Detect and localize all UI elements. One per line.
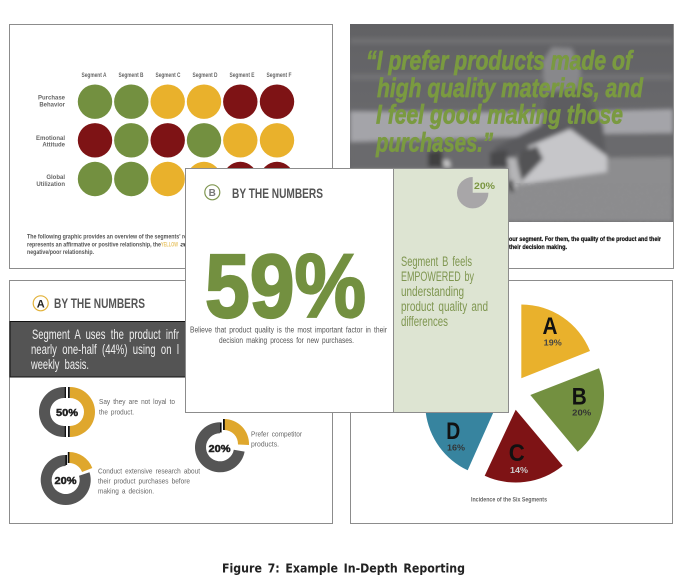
empowered statement: Segment B feels <box>401 254 472 269</box>
slice C <box>485 410 563 483</box>
column headings: Segment A <box>82 73 107 79</box>
donut: 20 percent competitor <box>195 419 249 472</box>
photo: person sitting on grass <box>350 24 673 222</box>
row labels: Global <box>46 175 65 181</box>
slice A: 19% <box>544 338 562 348</box>
empowered statement: EMPOWERED by <box>401 269 474 284</box>
row labels: Utilization <box>36 182 65 188</box>
statistic description: decision making process for new purchases. <box>219 336 354 345</box>
donut label: competitor <box>251 430 302 448</box>
column headings <box>82 73 292 79</box>
slice C: C <box>509 440 525 467</box>
panel: segment B by the numbers <box>186 168 508 412</box>
icon: segment B badge: B <box>209 188 216 199</box>
figure caption: Figure 7: Example In-Depth Reporting <box>222 562 465 576</box>
column headings: Segment F <box>266 73 292 79</box>
donut: 50 percent: 50% <box>56 407 79 419</box>
statistic description: Believe that product quality is the most important factor in their <box>190 326 387 334</box>
donut label: research: their product purchases before <box>98 476 190 486</box>
donut label: research <box>98 466 201 496</box>
photo panel description: our segment. For them, the quality of the product and their <box>509 236 662 243</box>
donut label: research: making a decision. <box>98 486 154 496</box>
empowered statement: differences <box>401 314 448 329</box>
row labels <box>36 96 66 188</box>
donut label: not loyal: the product. <box>99 408 134 416</box>
quote text <box>366 46 643 158</box>
heading: BY THE NUMBERS <box>232 185 323 201</box>
column headings: Segment D <box>192 73 218 79</box>
pie caption: Incidence of the Six Segments <box>471 498 548 504</box>
slice D: D <box>446 418 460 445</box>
icon: segment A badge <box>33 296 48 311</box>
pie icon: 20 percent: 20% <box>474 181 495 191</box>
statistic description <box>190 326 387 345</box>
panel: photo quote <box>350 24 674 268</box>
overview description: negative/poor relationship. <box>27 249 94 256</box>
overview description: represents an affirmative or positive relationship, the <box>27 242 161 248</box>
slice A <box>521 304 590 378</box>
usage banner: weekly basis. <box>30 356 89 372</box>
panel: segment incidence pie chart <box>350 280 672 524</box>
donut label: competitor: products. <box>251 440 279 448</box>
overview description: YELLOW <box>161 242 179 248</box>
slice B: 20% <box>572 408 592 418</box>
donut label: competitor: Prefer competitor <box>251 430 302 438</box>
big statistic: 59% <box>205 237 366 337</box>
empowered statement <box>401 254 488 329</box>
usage banner <box>10 322 190 377</box>
donut label: not loyal: Say they are not loyal to <box>99 397 175 406</box>
heading: BY THE NUMBERS <box>54 295 145 311</box>
slice A: A <box>542 313 558 340</box>
empowered statement: product quality and <box>401 299 488 314</box>
usage banner: nearly one-half (44%) using on l <box>31 341 179 357</box>
column headings: Segment B <box>118 73 144 79</box>
row labels: Behavior <box>39 102 66 108</box>
donut label: not loyal <box>99 397 175 416</box>
quote text: I feel good making those <box>376 100 623 130</box>
photo panel description: their decision making. <box>509 244 567 251</box>
slice B: B <box>572 383 587 410</box>
row labels: Emotional <box>36 136 65 142</box>
slice D <box>426 402 498 470</box>
row labels: Purchase <box>38 96 66 102</box>
row labels: Attitude <box>42 142 66 148</box>
column headings: Segment C <box>156 73 181 79</box>
donut label: research: Conduct extensive research about <box>98 466 201 476</box>
rating circles grid <box>78 84 294 196</box>
slice C: 14% <box>510 465 528 475</box>
pie icon: 20 percent <box>457 177 495 208</box>
overview description <box>27 234 187 256</box>
slice D: 16% <box>447 442 465 452</box>
column headings: Segment E <box>230 73 254 79</box>
slice B <box>530 368 604 452</box>
quote text: purchases.” <box>375 128 493 158</box>
panel: segment A by the numbers <box>10 280 332 524</box>
donut: 20 percent competitor: 20% <box>208 443 231 455</box>
photo panel description <box>509 236 662 251</box>
donut: 20 percent research <box>41 452 92 505</box>
empowered statement: understanding <box>401 284 464 299</box>
donut: 20 percent research: 20% <box>54 475 77 487</box>
panel: segment overview circles <box>10 24 332 268</box>
usage banner: Segment A uses the product infr <box>32 326 179 342</box>
icon: segment B badge <box>205 185 220 200</box>
icon: segment A badge: A <box>37 298 45 310</box>
overview description: The following graphic provides an overview of the segments' re <box>27 234 187 240</box>
side panel: green background <box>394 168 508 412</box>
donut: 50 percent <box>39 387 95 437</box>
overview description: a <box>180 242 187 248</box>
